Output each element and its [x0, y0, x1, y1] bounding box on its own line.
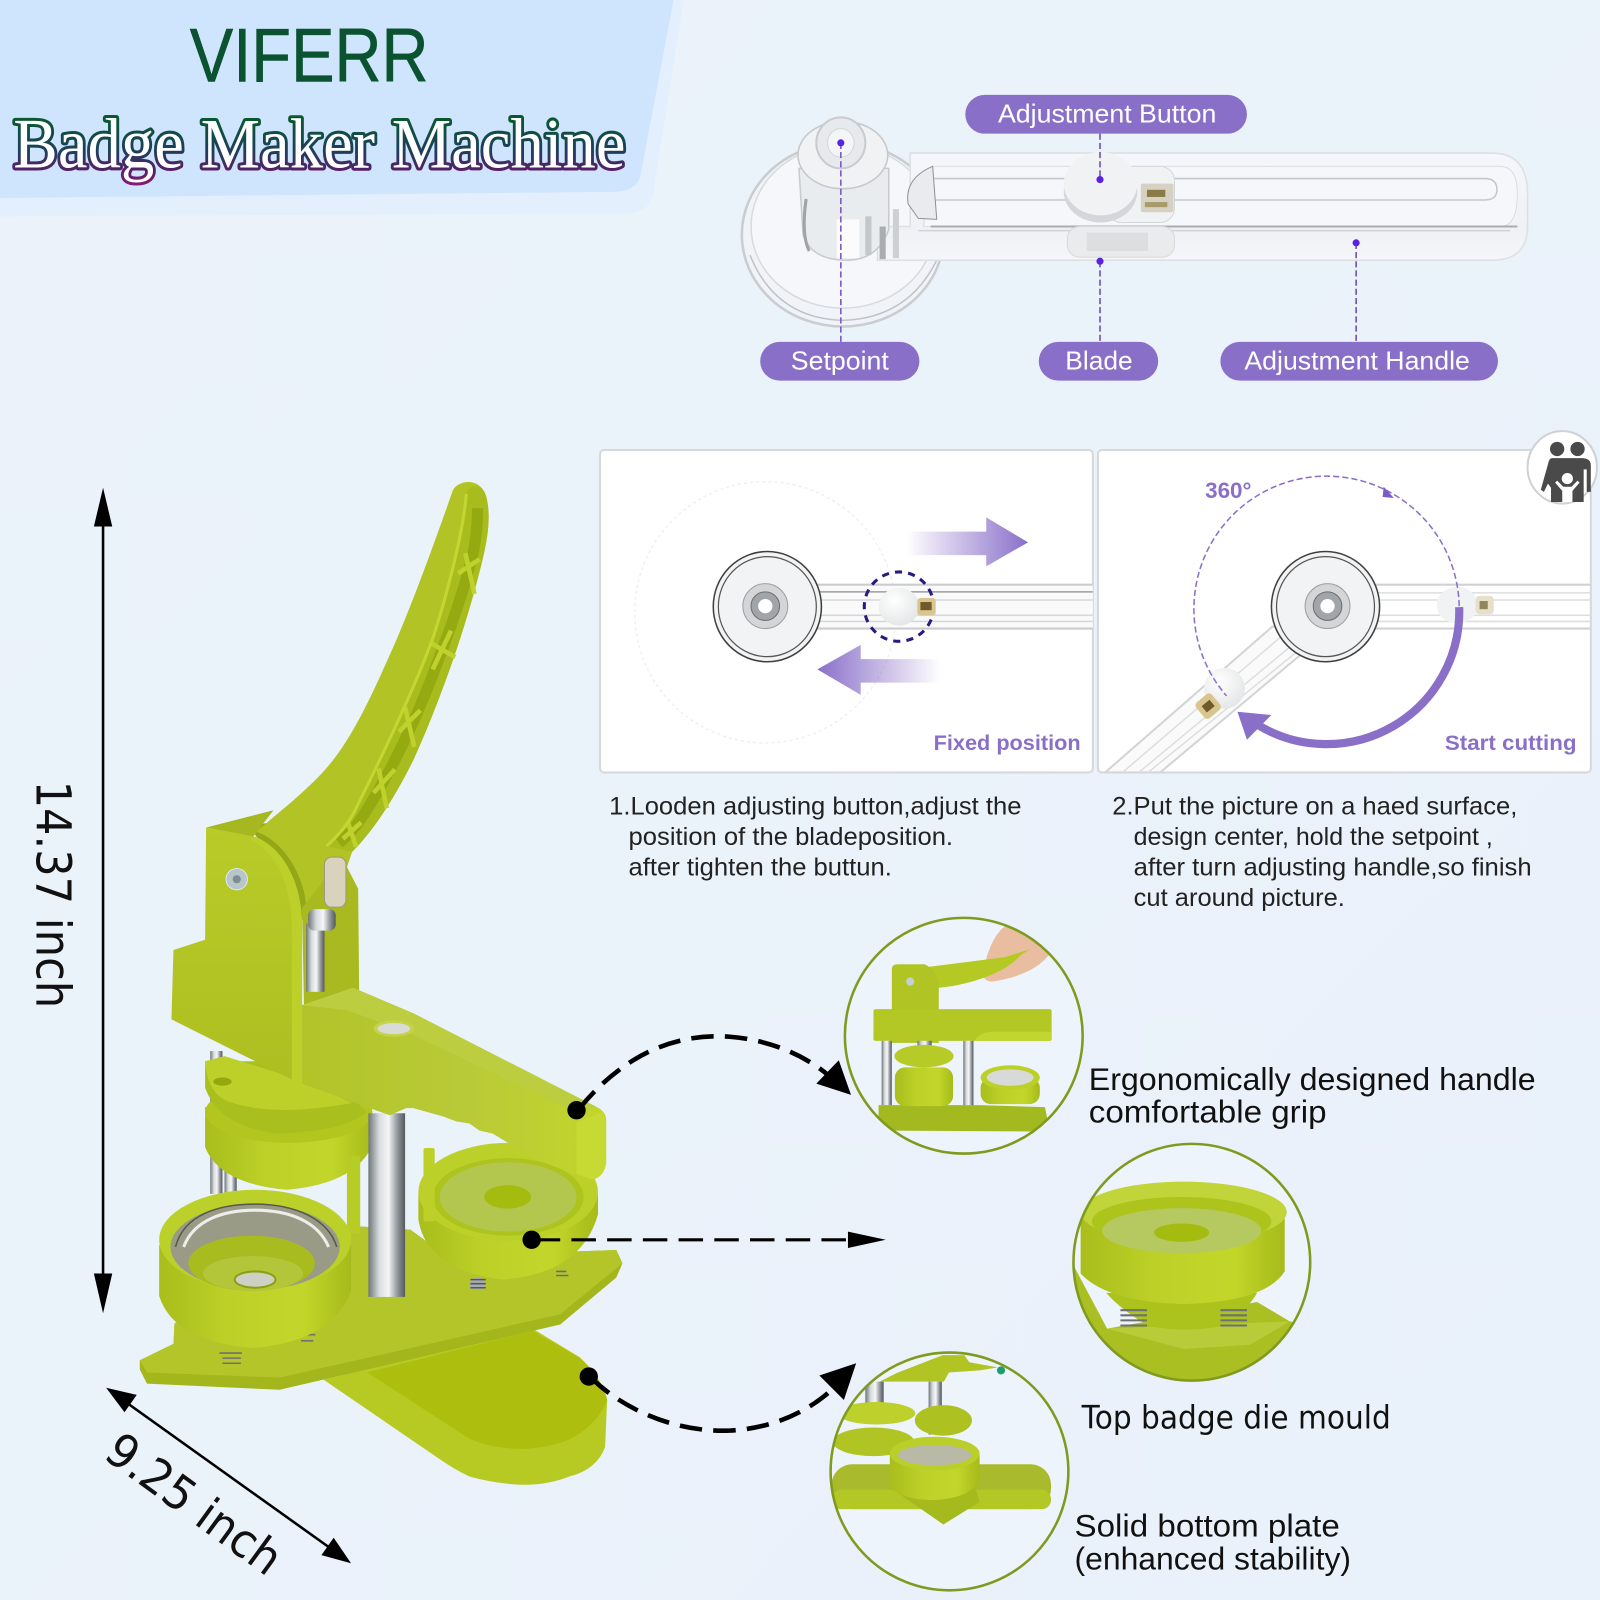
disc and hub — [1271, 552, 1380, 662]
rotation arrow — [1237, 607, 1459, 744]
label: top badge die mould: Top badge die mould — [1081, 1401, 1391, 1437]
header banner — [0, 0, 673, 198]
arrow: plate callout — [580, 1363, 856, 1431]
step 1 text: after tighten the buttun. — [629, 854, 892, 882]
dashed 360 path — [1194, 476, 1459, 696]
button and blade right — [1437, 587, 1494, 623]
housing front — [171, 828, 302, 1084]
title: VIFERR: VIFERR — [190, 14, 429, 99]
label: solid bottom plate: (enhanced stability) — [1074, 1540, 1351, 1576]
steel pillar — [368, 1113, 405, 1297]
arrow: die callout — [522, 1231, 886, 1249]
arrow left — [817, 645, 941, 695]
dimension: depth arrow — [106, 1388, 351, 1563]
step 1 text: 1.Looden adjusting button,adjust the — [609, 792, 1021, 820]
dimension: height arrow — [94, 488, 112, 1313]
cutter diagram — [742, 95, 1528, 381]
cutter: clear round base — [742, 143, 944, 327]
left die: badge cup — [159, 1156, 360, 1363]
step 2 text — [1112, 792, 1532, 912]
press arm — [302, 988, 606, 1180]
label: Adjustment Button — [965, 95, 1247, 183]
label: Adjustment Handle — [1220, 239, 1498, 381]
arrow right — [906, 517, 1028, 566]
button and blade — [879, 588, 936, 626]
base plate — [140, 1227, 622, 1390]
handle ribs — [327, 486, 489, 852]
cutter: adjustment handle body — [878, 153, 1528, 260]
hand — [982, 927, 1051, 982]
arrow: handle callout — [580, 1036, 851, 1108]
step 1 text — [609, 792, 1021, 882]
die body — [1106, 1293, 1257, 1330]
handle lever — [249, 482, 489, 923]
rear pillars — [210, 1051, 237, 1196]
label: solid bottom plate — [1074, 1508, 1351, 1576]
label: Blade: Blade — [1065, 347, 1133, 375]
cutter: setpoint cylinder — [798, 117, 899, 260]
bottom foot plate — [323, 1329, 607, 1485]
label: ergonomic handle — [1089, 1061, 1536, 1129]
label: Adjustment Handle: Adjustment Handle — [1244, 347, 1470, 375]
plate — [1074, 1268, 1292, 1380]
dimension: height label: 14.37 inch — [25, 781, 81, 1008]
dimension: depth label: 9.25 inch — [95, 1422, 292, 1587]
label: Setpoint — [760, 139, 919, 381]
cutter: blade holder — [1067, 166, 1174, 257]
step 2 text: cut around picture. — [1134, 884, 1345, 912]
button and blade lower left — [1194, 668, 1245, 720]
dashed circle around button — [864, 572, 934, 641]
step 1 text: position of the bladeposition. — [629, 823, 953, 851]
upper die plates — [205, 1056, 373, 1190]
label: Setpoint: Setpoint — [791, 347, 889, 375]
right die: top badge mould — [418, 1143, 598, 1290]
caption: Start cutting: Start cutting — [1445, 731, 1577, 755]
disc and hub — [713, 552, 821, 662]
label: solid bottom plate: Solid bottom plate — [1074, 1508, 1340, 1544]
dot on handle end — [567, 1101, 586, 1119]
icon: family — [1528, 431, 1597, 504]
step 2 text: design center, hold the setpoint , — [1134, 823, 1493, 851]
label: Blade — [1039, 258, 1158, 381]
title: Badge Maker Machine: Badge Maker Machine — [13, 104, 626, 183]
step 2 text: 2.Put the picture on a haed surface, — [1112, 792, 1517, 820]
inset: bottom plate — [831, 1353, 1068, 1590]
cutter: adjustment button — [1064, 152, 1137, 222]
inset: top die — [1073, 1144, 1316, 1388]
label: ergonomic handle: Ergonomically designed handle — [1089, 1061, 1536, 1097]
label: 360 degrees: 360° — [1205, 478, 1252, 503]
main product: badge machine — [140, 482, 622, 1485]
track rail — [786, 585, 1097, 629]
caption: Fixed position: Fixed position — [934, 731, 1081, 755]
label: Adjustment Button: Adjustment Button — [998, 100, 1216, 128]
inset: ergonomic handle — [845, 918, 1083, 1154]
step 2 text: after turn adjusting handle,so finish — [1134, 854, 1532, 882]
label: ergonomic handle: comfortable grip — [1089, 1093, 1327, 1129]
springs — [1120, 1310, 1247, 1326]
small machine — [873, 949, 1052, 1132]
track rails — [1105, 585, 1591, 772]
panel: start cutting — [1098, 450, 1591, 772]
panel: fixed position — [600, 450, 1097, 772]
housing rear and spindle — [206, 810, 359, 1010]
